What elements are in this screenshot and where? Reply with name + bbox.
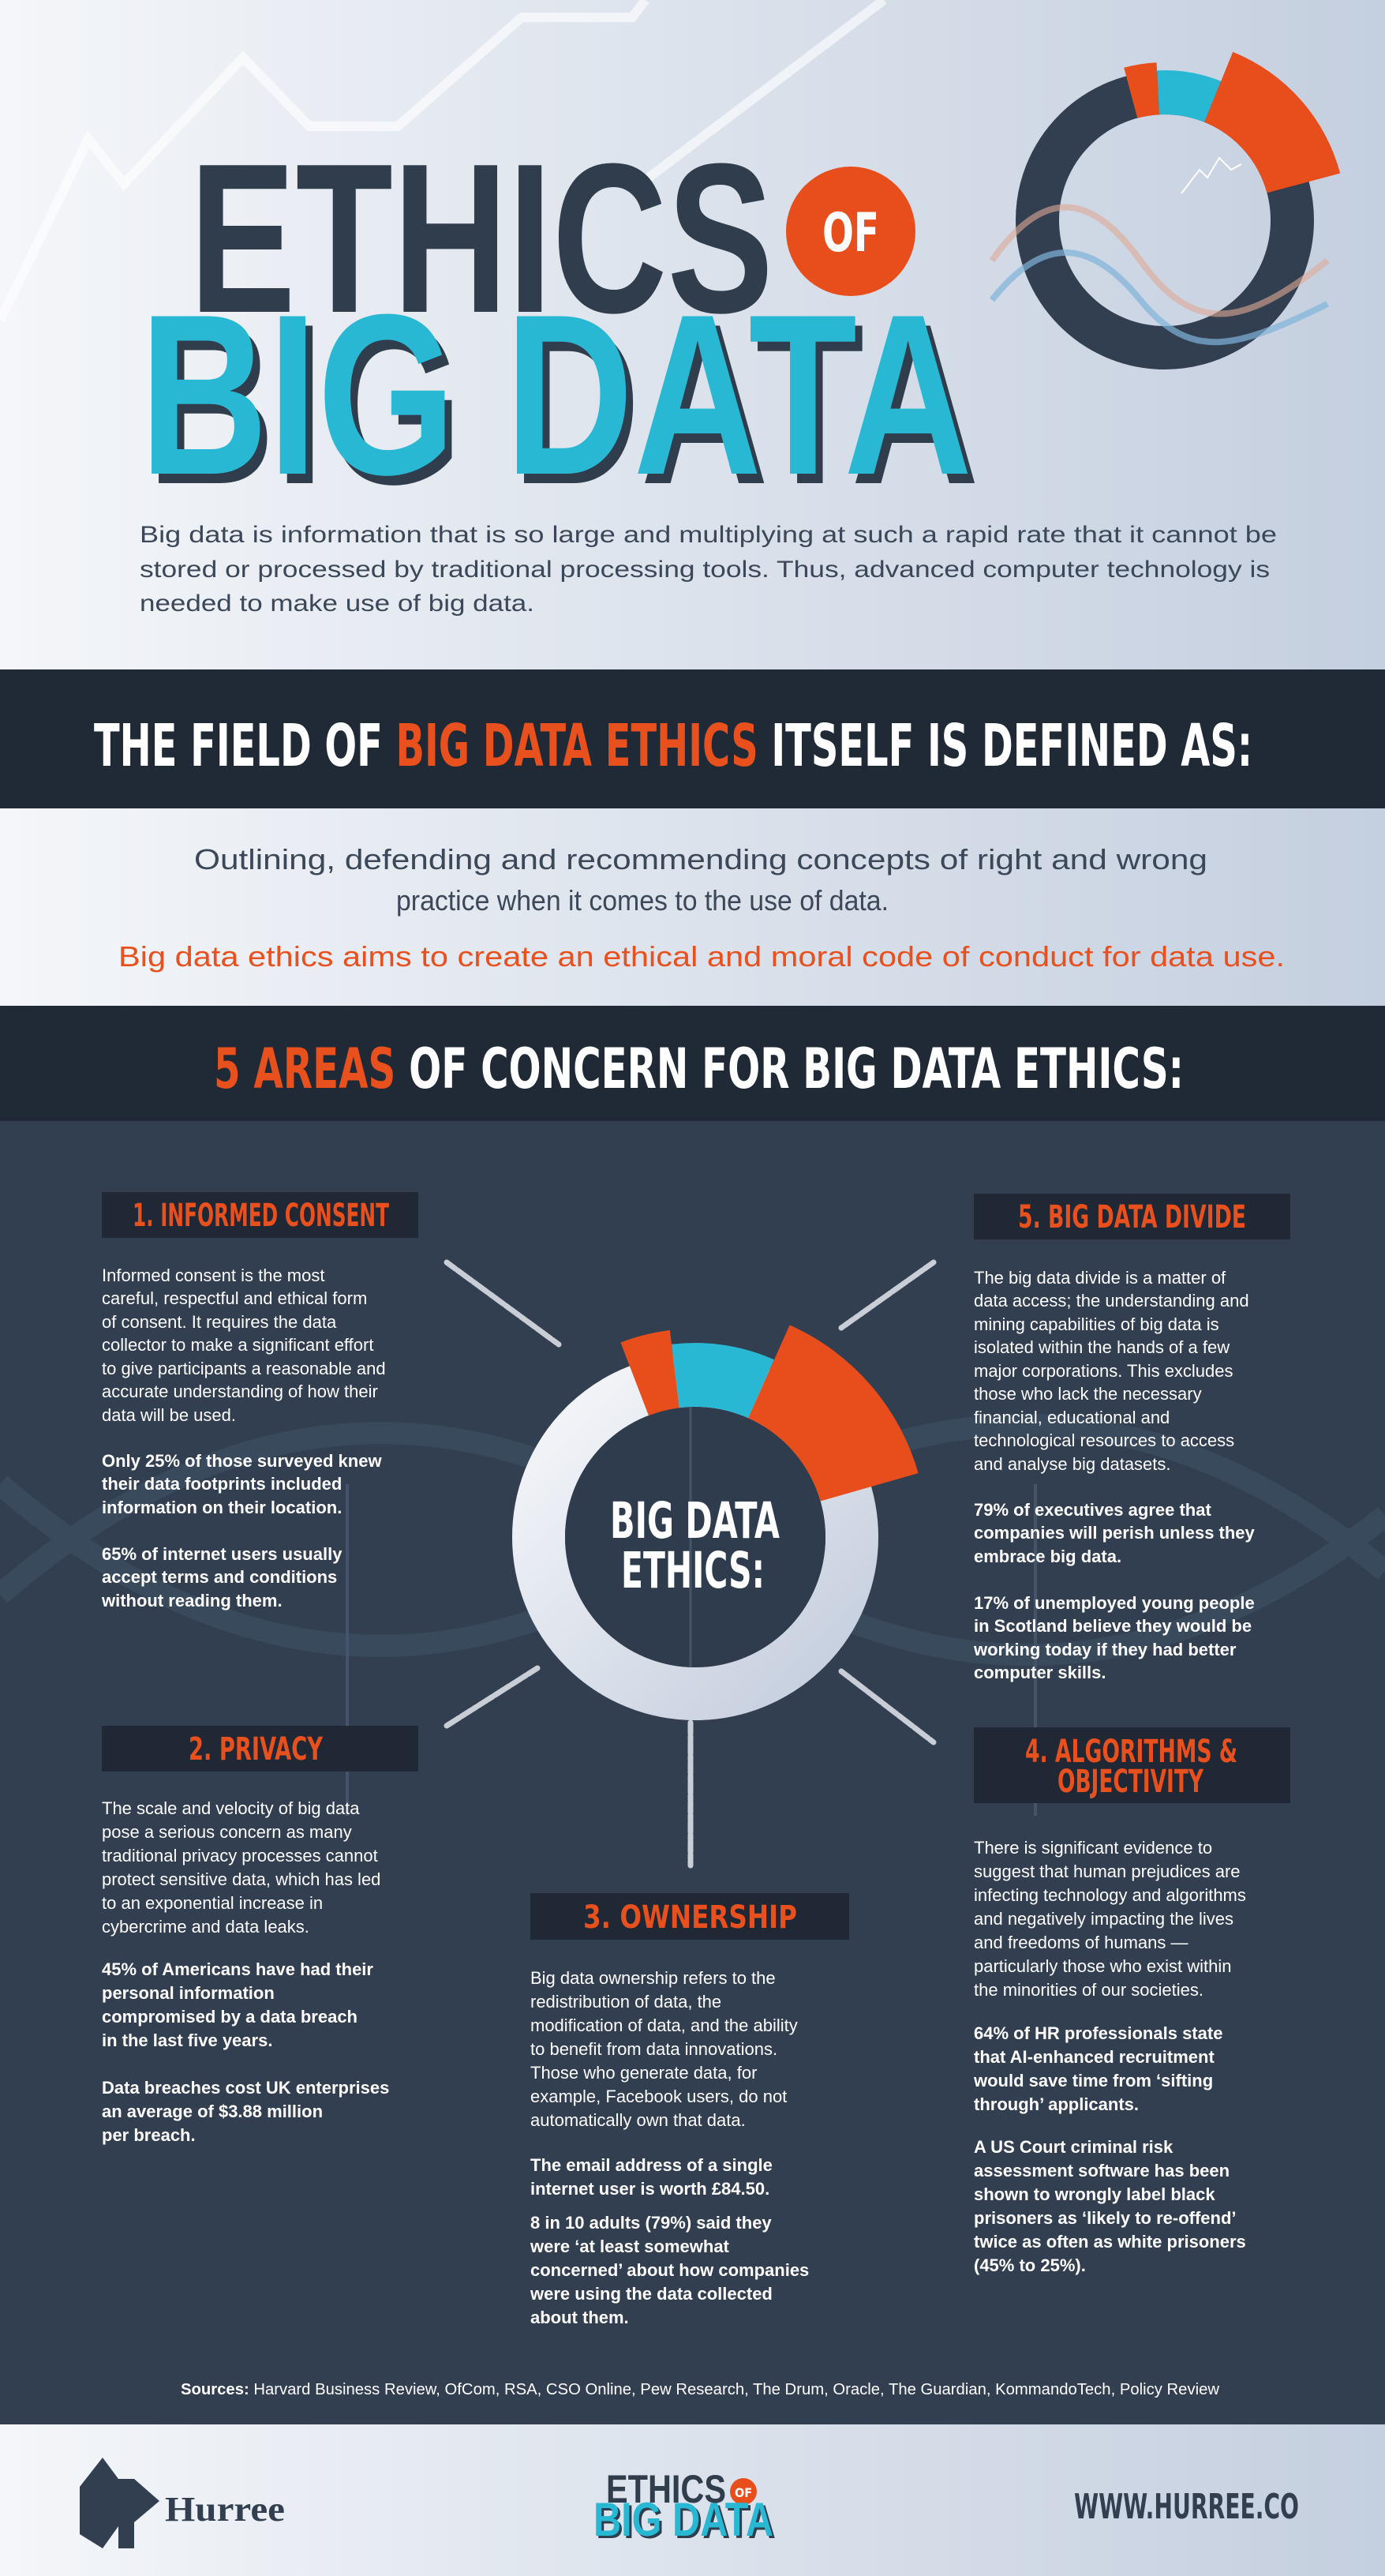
band: definition heading — [0, 669, 1385, 808]
panel: 2 privacy: pose a serious concern as many — [102, 1822, 352, 1842]
panel: 5 big data divide: working today if they had better — [973, 1640, 1237, 1659]
panel: 3 ownership: 3. OWNERSHIP — [583, 1899, 797, 1936]
icon: OF circle: OF — [822, 202, 879, 264]
panel: 5 big data divide: financial, educational and — [974, 1408, 1170, 1427]
logo: Hurree: Hurree — [165, 2490, 285, 2529]
center donut: big data ethics: ETHICS: — [621, 1542, 765, 1599]
panel: 2 privacy: 45% of Americans have had their — [102, 1959, 373, 1979]
panel: 3 ownership: modification of data, and the ability — [530, 2015, 798, 2035]
website url: WWW.HURREE.CO — [1074, 2487, 1299, 2527]
panel: 2 privacy: Data breaches cost UK enterprises — [102, 2078, 389, 2098]
logo: Hurree — [80, 2458, 285, 2548]
panel: 3 ownership: Big data ownership refers to the — [530, 1968, 776, 1988]
panel: 4 algorithms & objectivity: that AI-enhanced recruitment — [974, 2047, 1215, 2067]
logo: ethics of big data small: ETHICS — [606, 2467, 726, 2511]
panel: 5 big data divide: computer skills. — [974, 1663, 1106, 1682]
sources: Sources: Harvard Business Review, OfCom, RSA, CSO Online, Pew Research, The Drum, Oracle, The Guardian, KommandoTech, Policy Review — [181, 2381, 1220, 2398]
panel: 1 informed consent: 1. INFORMED CONSENT — [133, 1198, 389, 1234]
panel: 4 algorithms & objectivity: suggest that human prejudices are — [974, 1862, 1241, 1881]
panel: 4 algorithms & objectivity: assessment software has been — [974, 2161, 1230, 2180]
panel: 4 algorithms & objectivity: OBJECTIVITY — [1057, 1764, 1204, 1800]
band: 5 areas heading — [0, 1006, 1385, 1121]
panel: 3 ownership: concerned’ about how companies — [530, 2260, 809, 2280]
title: BIG DATA: BIG DATA — [147, 276, 979, 532]
panel: 1 informed consent: Only 25% of those surveyed knew — [102, 1451, 382, 1471]
panel: 1 informed consent: 65% of internet users usually — [102, 1544, 343, 1564]
definition text: Outlining, defending and recommending concepts of right and wrong — [194, 843, 1207, 876]
panel: 5 big data divide: embrace big data. — [974, 1547, 1121, 1566]
panel: 5 big data divide: 5. BIG DATA DIVIDE — [1018, 1199, 1246, 1236]
icon: OF circle — [786, 167, 915, 296]
center donut: big data ethics — [538, 1325, 919, 1694]
panel: 1 informed consent — [101, 1192, 418, 1610]
panel: 1 informed consent: accept terms and conditions — [102, 1567, 337, 1587]
panel: 3 ownership: to benefit from data innovations. — [530, 2039, 777, 2059]
logo: ethics of big data small: OF — [735, 2485, 752, 2500]
panel: 2 privacy: 2. PRIVACY — [189, 1731, 324, 1768]
panel: 3 ownership: automatically own that data. — [530, 2110, 746, 2130]
panel: 3 ownership: about them. — [530, 2308, 629, 2327]
panel: 4 algorithms & objectivity: 64% of HR professionals state — [974, 2023, 1222, 2043]
panel: 5 big data divide: 79% of executives agree that — [974, 1500, 1211, 1520]
panel: 3 ownership: Those who generate data, for — [530, 2063, 757, 2083]
panel: 5 big data divide: isolated within the hands of a few — [974, 1337, 1230, 1357]
panel: 2 privacy: cybercrime and data leaks. — [102, 1917, 309, 1937]
panel: 2 privacy: The scale and velocity of big data — [102, 1798, 360, 1818]
panel: 1 informed consent: Informed consent is the most — [102, 1266, 324, 1285]
header background — [0, 0, 1385, 669]
panel: 2 privacy — [102, 1726, 418, 2145]
panel: 2 privacy: protect sensitive data, which has led — [102, 1869, 380, 1889]
logo: ethics of big data small: BIG DATA — [596, 2495, 776, 2548]
panel: 4 algorithms & objectivity: through’ applicants. — [974, 2094, 1139, 2114]
panel: 5 big data divide: mining capabilities of big data is — [974, 1314, 1219, 1334]
definition text: Big data ethics aims to create an ethical and moral code of conduct for data use. — [118, 940, 1285, 973]
panel: 4 algorithms & objectivity: 4. ALGORITHMS & — [1025, 1734, 1237, 1770]
panel: 4 algorithms & objectivity: A US Court criminal risk — [974, 2137, 1174, 2157]
panel: 5 big data divide: those who lack the necessary — [974, 1384, 1202, 1404]
definition text — [0, 808, 1385, 1006]
panel: 5 big data divide: major corporations. This excludes — [974, 1361, 1233, 1381]
panel: 4 algorithms & objectivity: twice as often as white prisoners — [974, 2232, 1246, 2252]
panel: 2 privacy: in the last five years. — [102, 2030, 272, 2050]
center donut: big data ethics: BIG DATA — [610, 1492, 780, 1550]
panel: 3 ownership: The email address of a single — [530, 2155, 773, 2175]
panel: 4 algorithms & objectivity: would save time from ‘sifting — [973, 2071, 1213, 2090]
footer background — [0, 2424, 1385, 2576]
title: BIG DATA: BIG DATA — [140, 267, 972, 523]
panel: 5 big data divide: companies will perish unless they — [974, 1523, 1256, 1543]
panel: 5 big data divide: The big data divide is a matter of — [974, 1268, 1226, 1288]
intro text — [140, 522, 1277, 617]
panel: 1 informed consent: their data footprints included — [102, 1474, 342, 1494]
panel: 1 informed consent: collector to make a significant effort — [102, 1335, 373, 1355]
panel: 5 big data divide — [973, 1194, 1290, 1682]
panel: 2 privacy: traditional privacy processes cannot — [102, 1846, 378, 1865]
panel: 1 informed consent: information on their location. — [102, 1498, 342, 1517]
panel: 3 ownership — [530, 1893, 849, 2327]
panel: 1 informed consent: accurate understanding of how their — [102, 1382, 378, 1401]
panel: 4 algorithms & objectivity: There is significant evidence to — [974, 1838, 1212, 1858]
icon: header donut chart — [992, 52, 1340, 347]
panel: 3 ownership: were using the data collected — [530, 2284, 773, 2304]
panel: 2 privacy: compromised by a data breach — [102, 2007, 357, 2027]
panel: 3 ownership: 8 in 10 adults (79%) said they — [530, 2213, 772, 2233]
panel: 1 informed consent: without reading them. — [101, 1591, 283, 1610]
panel: 1 informed consent: to give participants a reasonable and — [102, 1359, 386, 1378]
panel: 5 big data divide: technological resources to access — [974, 1430, 1234, 1450]
panel: 3 ownership: were ‘at least somewhat — [530, 2237, 730, 2256]
logo: ethics of big data small — [593, 2467, 776, 2548]
panel: 2 privacy: an average of $3.88 million — [102, 2102, 323, 2121]
panel: 4 algorithms & objectivity: shown to wrongly label black — [974, 2184, 1215, 2204]
panel: 5 big data divide: 17% of unemployed young people — [974, 1593, 1255, 1613]
panel: 4 algorithms & objectivity — [973, 1727, 1290, 2275]
panel: 4 algorithms & objectivity: the minorities of our societies. — [974, 1980, 1203, 2000]
logo: ethics of big data small: BIG DATA — [593, 2493, 773, 2546]
radiating brush lines — [447, 1262, 934, 1865]
intro text: stored or processed by traditional processing tools. Thus, advanced computer technology is — [140, 557, 1270, 583]
panel: 4 algorithms & objectivity: (45% to 25%). — [974, 2255, 1086, 2275]
panel: 5 big data divide: in Scotland believe they would be — [974, 1616, 1252, 1636]
intro text: Big data is information that is so large and multiplying at such a rapid rate that it cannot be — [140, 522, 1277, 548]
panel: 3 ownership: internet user is worth £84.50. — [530, 2179, 769, 2199]
panel: 3 ownership: example, Facebook users, do not — [530, 2087, 787, 2106]
panel: 1 informed consent: careful, respectful and ethical form — [102, 1288, 367, 1308]
panel: 1 informed consent: data will be used. — [102, 1405, 236, 1425]
title: ETHICS: ETHICS — [189, 120, 773, 358]
panel: 2 privacy: to an exponential increase in — [102, 1893, 323, 1913]
panel: 4 algorithms & objectivity: and freedoms of humans — — [974, 1933, 1188, 1952]
panel: 2 privacy: per breach. — [102, 2125, 196, 2145]
panel: 1 informed consent: of consent. It requires the data — [102, 1312, 337, 1332]
panel: 4 algorithms & objectivity: prisoners as ‘likely to re-offend’ — [974, 2208, 1237, 2228]
panel: 5 big data divide: data access; the understanding and — [974, 1291, 1249, 1310]
definition text: practice when it comes to the use of data. — [396, 884, 889, 917]
panel: 4 algorithms & objectivity: infecting technology and algorithms — [974, 1885, 1246, 1905]
panel: 4 algorithms & objectivity: particularly those who exist within — [974, 1956, 1231, 1976]
panel: 4 algorithms & objectivity: and negatively impacting the lives — [974, 1909, 1233, 1929]
panel: 3 ownership: redistribution of data, the — [530, 1992, 721, 2012]
panel: 2 privacy: personal information — [102, 1983, 275, 2003]
panel: 5 big data divide: and analyse big datasets. — [974, 1454, 1171, 1474]
intro text: needed to make use of big data. — [140, 591, 534, 617]
main panel background — [0, 1121, 1385, 2424]
